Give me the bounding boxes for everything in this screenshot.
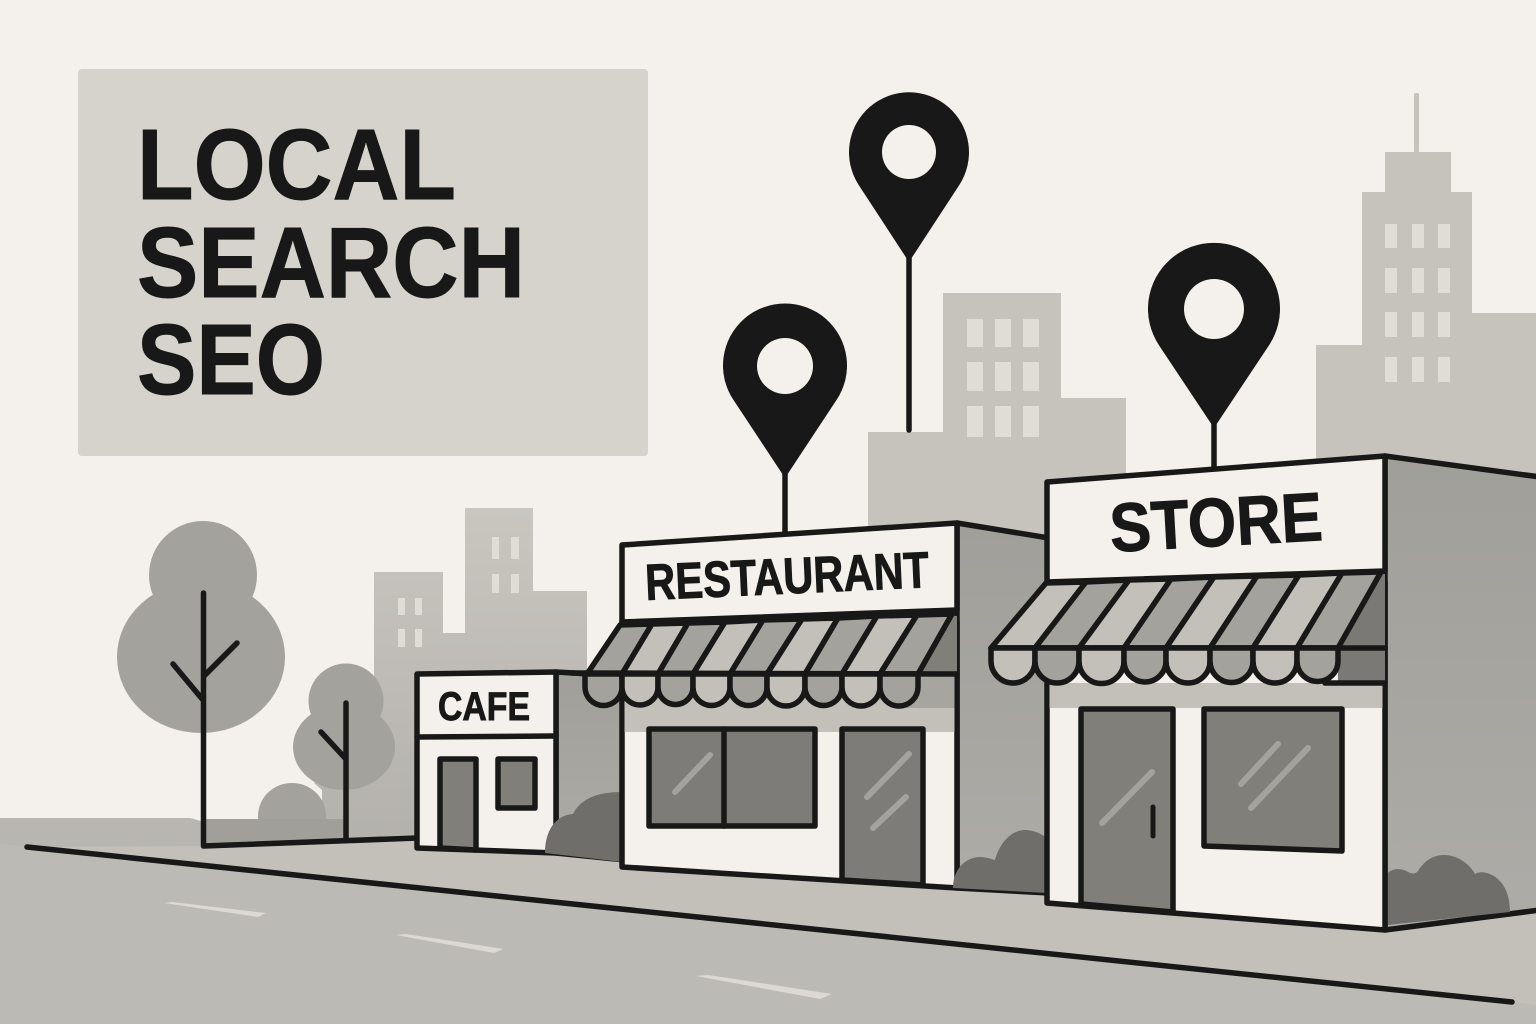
- store side wall: [1385, 456, 1536, 930]
- shop: store: [991, 456, 1536, 930]
- map pin: store: [1148, 243, 1280, 468]
- cafe sign text: CAFE: [438, 685, 530, 729]
- tree: large: [117, 521, 417, 846]
- skyline: right tower: [1316, 93, 1536, 493]
- cafe door: [440, 759, 476, 850]
- store sign: [1047, 456, 1385, 582]
- store door: [1081, 709, 1173, 912]
- heading: LOCAL SEARCH SEO: LOCAL: [137, 109, 456, 221]
- shop: cafe: [417, 672, 625, 862]
- store bush: [1388, 855, 1510, 925]
- restaurant sign: [622, 523, 957, 622]
- store window: [1204, 709, 1342, 851]
- heading: LOCAL SEARCH SEO: SEARCH: [137, 207, 525, 319]
- map pin: restaurant: [723, 303, 847, 532]
- shop: restaurant: [572, 523, 1049, 893]
- road edge line: [27, 847, 1512, 1002]
- cafe window: [498, 759, 535, 808]
- heading: LOCAL SEARCH SEO: [137, 109, 525, 416]
- awning shadow: [624, 676, 954, 732]
- store sign text: STORE: [1108, 478, 1325, 567]
- restaurant bush: [953, 830, 1047, 893]
- restaurant side wall: [957, 523, 1049, 893]
- skyline: centre building: [868, 293, 1126, 560]
- restaurant door: [842, 729, 923, 885]
- restaurant facade: [622, 622, 957, 888]
- restaurant awning: [572, 614, 957, 706]
- ground and road: [0, 818, 1536, 1024]
- road lane markings: [164, 902, 832, 999]
- store facade: [1047, 582, 1385, 930]
- heading: LOCAL SEARCH SEO: SEO: [137, 304, 325, 416]
- restaurant sign text: RESTAURANT: [644, 541, 930, 611]
- tree: small: [293, 664, 395, 840]
- store awning: [991, 572, 1385, 684]
- awning shadow: [1050, 683, 1382, 708]
- title panel: [78, 69, 648, 456]
- tree: background bush: [258, 783, 326, 819]
- cafe bush: [545, 792, 622, 862]
- map pin: centre: [849, 92, 969, 430]
- skyline: left buildings: [314, 508, 622, 845]
- restaurant window: [649, 729, 815, 826]
